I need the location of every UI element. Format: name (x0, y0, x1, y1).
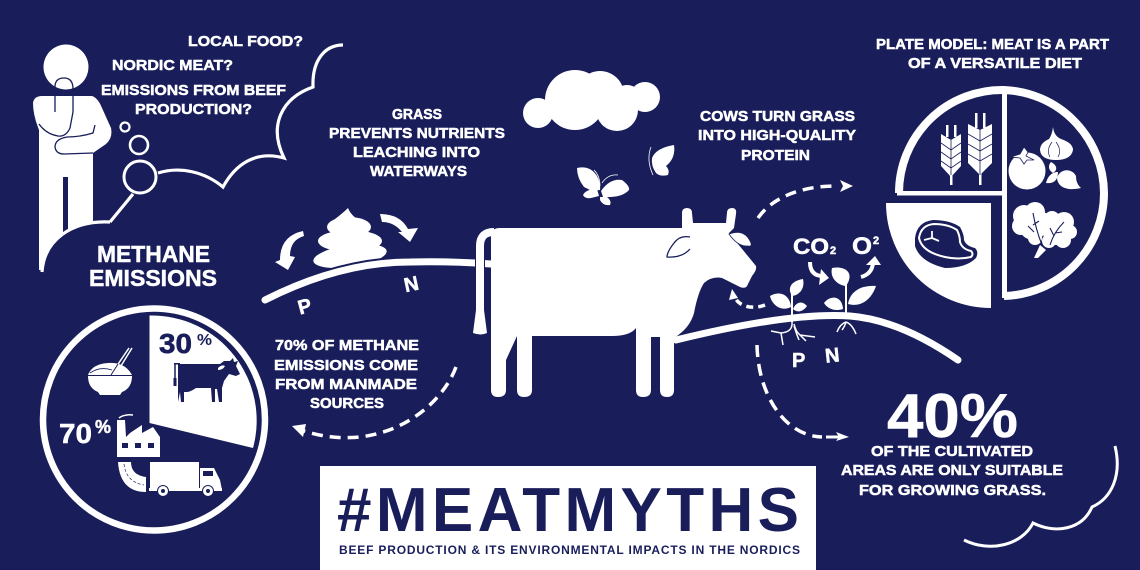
text: cows turn grass: INTO HIGH-QUALITY (698, 128, 856, 144)
icon: spinach (1012, 202, 1077, 258)
heading: methane emissions: METHANE (97, 241, 210, 267)
label: 30 percent: 30 (159, 328, 192, 359)
pie slice: 30 percent (150, 315, 257, 448)
banner title: #MEATMYTHS (337, 476, 799, 545)
pie chart: plate model (886, 87, 1104, 308)
icon: basil (1046, 162, 1081, 189)
stat: 40 percent: OF THE CULTIVATED (871, 443, 1033, 460)
text: plate model (876, 37, 1109, 72)
text: 70 percent of methane: 70% OF METHANE (275, 338, 419, 354)
text: questions: PRODUCTION? (135, 101, 252, 118)
icon: plant left (770, 279, 815, 345)
arrow: grass to 40 percent (757, 345, 849, 441)
text: grass prevents nutrients: WATERWAYS (370, 164, 467, 180)
icon: butterfly small (649, 145, 674, 176)
text: questions (101, 33, 303, 118)
label: CO2: 2 (830, 245, 836, 257)
cloud outline bottom right (964, 446, 1117, 546)
icon: rice bowl (88, 348, 132, 395)
label: 70 percent: % (95, 417, 111, 437)
icon: steak (915, 220, 977, 268)
text: 70 percent of methane: EMISSIONS COME (274, 358, 418, 374)
text: plate model: OF A VERSATILE DIET (908, 56, 1082, 72)
label: 30 percent: % (197, 332, 212, 349)
arrow: cow to protein (758, 180, 853, 218)
icon: garlic (1040, 127, 1073, 160)
text: 70 percent of methane (274, 338, 419, 412)
icon: road (118, 462, 146, 492)
label: P left: P (296, 295, 314, 319)
label: N right: N (824, 344, 841, 368)
label: P right: P (792, 350, 805, 372)
text: questions: LOCAL FOOD? (188, 33, 303, 50)
label: O2 (852, 233, 879, 260)
icon: tomato (1008, 147, 1046, 190)
text: grass prevents nutrients (329, 107, 505, 180)
heading: methane emissions (89, 241, 217, 291)
icon: plant right (824, 268, 876, 334)
icon: manure (312, 208, 388, 272)
text: 70 percent of methane: FROM MANMADE (275, 377, 417, 393)
label: 30 percent (159, 328, 212, 359)
label: O2: O (852, 233, 872, 260)
arrow: manure right (380, 214, 418, 242)
text: cows turn grass: PROTEIN (741, 148, 810, 164)
text: questions: EMISSIONS FROM BEEF (101, 82, 286, 99)
stat: 40 percent (841, 382, 1063, 499)
icon: cow (473, 208, 756, 397)
thought cloud outline (42, 45, 343, 300)
text: cows turn grass: COWS TURN GRASS (700, 109, 855, 125)
label: O2: 2 (873, 235, 879, 247)
icon: cloud (523, 70, 660, 131)
text: plate model: PLATE MODEL: MEAT IS A PART (876, 37, 1109, 53)
text: grass prevents nutrients: PREVENTS NUTRIENTS (329, 126, 505, 142)
label: 70 percent (59, 417, 111, 449)
banner subtitle: BEEF PRODUCTION & ITS ENVIRONMENTAL IMPACTS IN THE NORDICS (339, 543, 800, 557)
stat: 40 percent: FOR GROWING GRASS. (859, 482, 1046, 499)
stat: 40 percent: AREAS ARE ONLY SUITABLE (841, 462, 1063, 479)
plate slice: meat (886, 203, 991, 308)
text: grass prevents nutrients: GRASS (392, 107, 442, 123)
banner: meatmyths (320, 466, 816, 570)
grass line left (265, 262, 491, 300)
icon: wheat (941, 113, 992, 185)
label: 70 percent: 70 (59, 418, 92, 449)
icon: thinking person (33, 44, 111, 270)
label: CO2: CO (793, 234, 829, 259)
arrow: plant to O2 (861, 256, 881, 277)
icon: factory (117, 415, 160, 457)
label: N left: N (402, 273, 421, 297)
arrow: CO2 to plant (810, 262, 829, 285)
plate ring (899, 90, 1104, 296)
text: cows turn grass (698, 109, 856, 164)
heading: methane emissions: EMISSIONS (89, 265, 217, 291)
text: grass prevents nutrients: LEACHING INTO (353, 145, 480, 161)
arrow: sources dashed (292, 367, 456, 438)
stat: 40 percent: 40% (887, 382, 1018, 451)
arrow: plant to cow (729, 289, 765, 307)
grass line right (676, 316, 958, 360)
text: 70 percent of methane: SOURCES (310, 396, 384, 412)
icon: small cow (174, 358, 240, 402)
icon: truck (149, 462, 222, 496)
text: questions: NORDIC MEAT? (112, 57, 233, 74)
icon: butterfly large (577, 167, 629, 205)
pie chart: methane sources (43, 308, 265, 530)
arrow: manure left (275, 231, 304, 270)
